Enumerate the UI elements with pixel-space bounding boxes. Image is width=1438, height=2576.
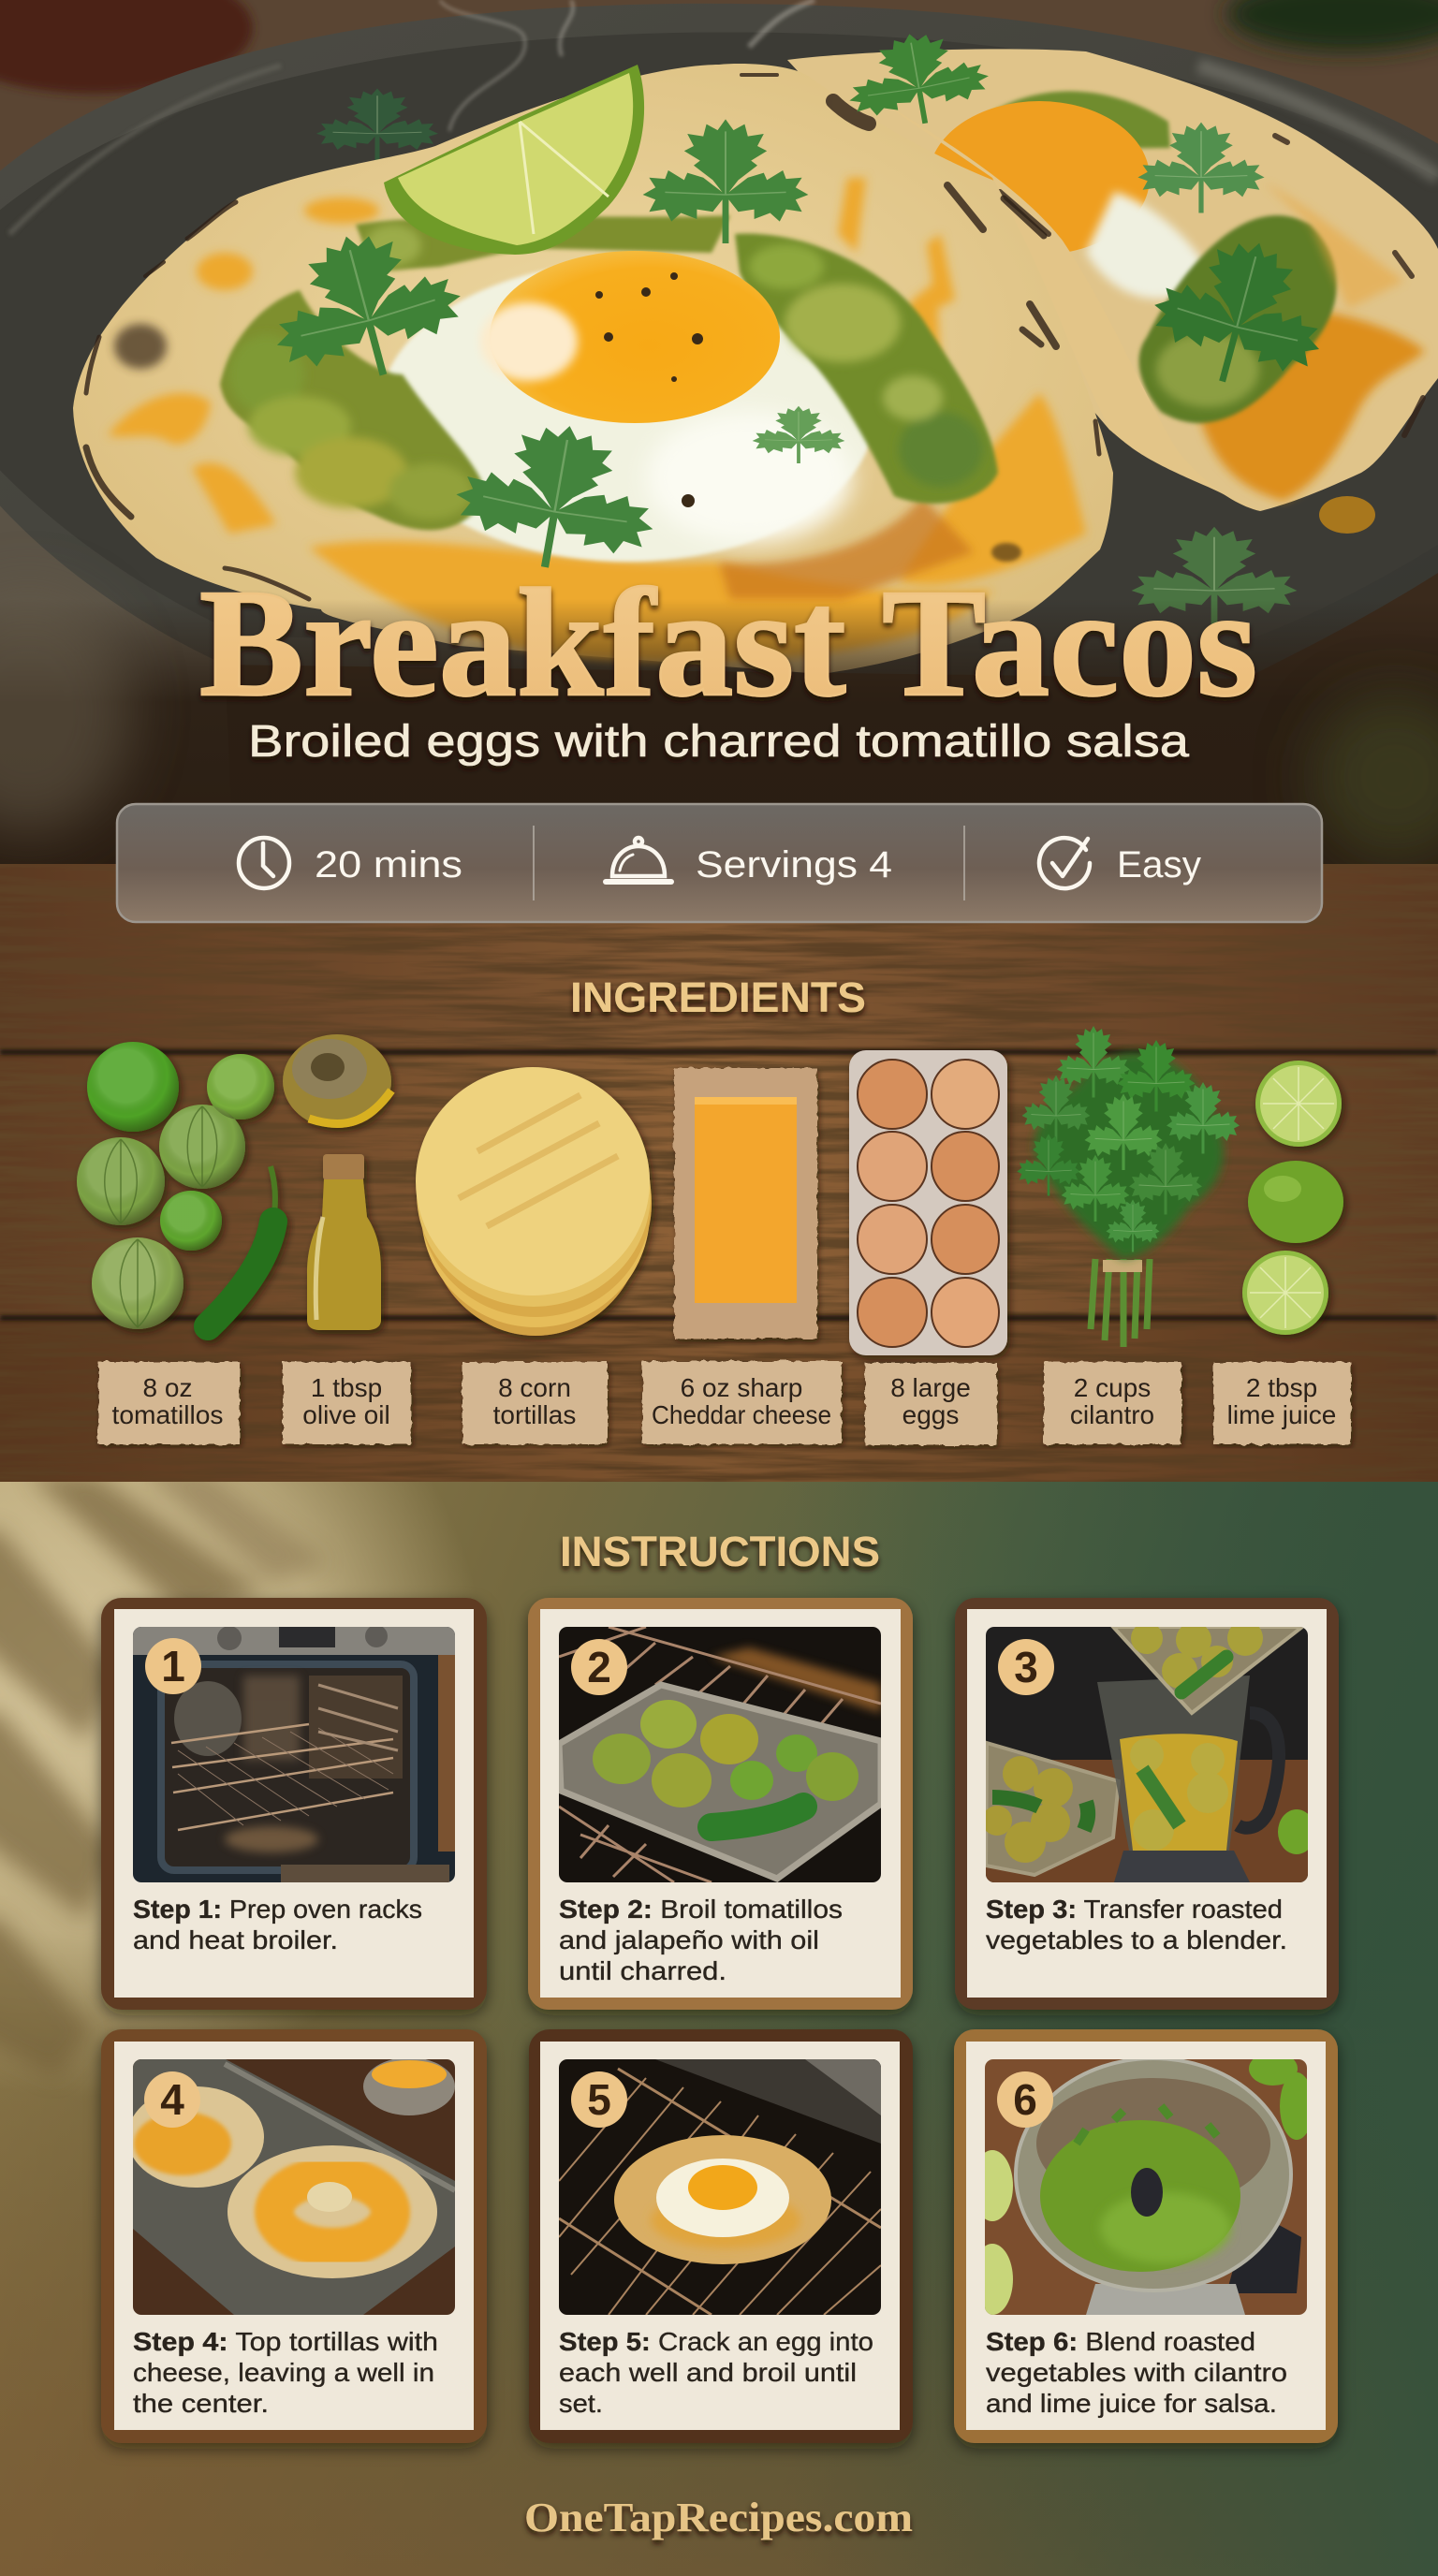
dark fade overlay — [0, 599, 1438, 871]
step card 6 — [954, 2029, 1338, 2443]
step card 2 — [528, 1598, 913, 2010]
label: olive oil — [283, 1362, 411, 1444]
servings: Servings 4 — [696, 844, 892, 886]
title: Breakfast Tacos — [199, 557, 1257, 728]
step card 5 — [529, 2029, 913, 2443]
label: lime juice: 2 tbsp — [1246, 1373, 1317, 1402]
panel: hero photo of tacos — [0, 0, 1438, 880]
step 4 text: Step 4: Top tortillas with — [133, 2327, 421, 2356]
label: cilantro: 2 cups — [1074, 1373, 1151, 1402]
illustration: tomatillos on tray — [559, 1627, 881, 1882]
label: cheddar: 6 oz sharp — [681, 1373, 802, 1402]
badge: 3: 3 — [1014, 1643, 1038, 1691]
label: cheddar: Cheddar cheese — [652, 1400, 831, 1429]
badge: 2 — [571, 1639, 627, 1695]
label: lime juice: lime juice — [1227, 1400, 1336, 1429]
panel: instructions background — [0, 1273, 1438, 2576]
label: tomatillos: tomatillos — [112, 1400, 223, 1429]
step 5 text: set. — [559, 2389, 603, 2418]
step card 4 — [101, 2029, 487, 2443]
linen cloth — [0, 505, 213, 689]
label: olive oil: olive oil — [302, 1400, 390, 1429]
step 2 text: and jalapeño with oil — [559, 1925, 819, 1954]
step card 3 — [955, 1598, 1339, 2010]
cilantro leaf on plate — [316, 88, 438, 163]
step 1 text: and heat broiler. — [133, 1925, 338, 1954]
label: tortillas — [462, 1362, 608, 1444]
ingredient: limes — [1242, 1061, 1343, 1335]
ingredient labels — [98, 1361, 1351, 1445]
badge: 1 — [145, 1638, 201, 1694]
badge: 6: 6 — [1013, 2075, 1037, 2124]
steam — [440, 0, 814, 131]
step card 1 — [101, 1598, 487, 2010]
charred spots — [86, 75, 1099, 599]
step 3 text: vegetables to a blender. — [986, 1925, 1287, 1954]
melted cheese — [108, 178, 1086, 663]
step 4 text: the center. — [133, 2389, 269, 2418]
label: cilantro: cilantro — [1070, 1400, 1154, 1429]
label: tortillas: 8 corn — [498, 1373, 571, 1402]
step 3 text: Step 3: Transfer roasted — [986, 1895, 1275, 1924]
label: tomatillos: 8 oz — [143, 1373, 192, 1402]
ingredient: cheddar — [674, 1068, 817, 1339]
info bar — [117, 804, 1322, 922]
label: tomatillos — [98, 1362, 240, 1444]
ingredient: tomatillos and jalapeno — [77, 1042, 275, 1329]
lime wedge — [384, 65, 644, 255]
step 4 text: cheese, leaving a well in — [133, 2358, 434, 2387]
step 6 text: and lime juice for salsa. — [986, 2389, 1277, 2418]
ingredient: eggs in carton — [849, 1050, 1007, 1355]
badge: 4 — [144, 2071, 200, 2128]
step 6 text: Step 6: Blend roasted — [986, 2327, 1247, 2356]
green salsa left — [220, 215, 730, 530]
panel: wood ingredients board — [0, 864, 1438, 1482]
right taco — [787, 49, 1438, 534]
step 5 text: Step 5: Crack an egg into — [559, 2327, 863, 2356]
label: eggs: eggs — [902, 1400, 959, 1429]
illustration: blender with vegetables — [982, 1620, 1315, 1882]
egg white — [379, 262, 875, 562]
green salsa right — [735, 234, 998, 504]
step 2 text: until charred. — [559, 1956, 726, 1985]
badge: 5 — [571, 2071, 627, 2128]
prep time: 20 mins — [315, 844, 462, 886]
ingredient: corn tortillas — [416, 1067, 652, 1336]
step 5 text: each well and broil until — [559, 2358, 857, 2387]
cilantro leaves — [255, 22, 1342, 632]
icon: serving cloche — [606, 838, 671, 882]
badge: 4: 4 — [160, 2075, 184, 2124]
label: eggs — [865, 1363, 997, 1445]
illustration: open oven — [133, 1625, 455, 1883]
heading: instructions: INSTRUCTIONS — [560, 1528, 880, 1575]
icon: check circle — [1039, 838, 1090, 888]
ingredient: cilantro bunch — [1017, 1026, 1240, 1347]
footer brand: OneTapRecipes.com — [524, 2495, 913, 2540]
ingredient: olive oil — [283, 1034, 391, 1330]
label: cheddar — [642, 1361, 842, 1444]
heading: ingredients: INGREDIENTS — [570, 973, 866, 1021]
difficulty: Easy — [1117, 844, 1201, 886]
step 1 text: Step 1: Prep oven racks — [133, 1895, 418, 1924]
plate — [0, 4, 1438, 679]
yolk — [490, 251, 780, 423]
label: lime juice — [1213, 1362, 1351, 1444]
step 6 text: vegetables with cilantro — [986, 2358, 1287, 2387]
icon: clock — [239, 838, 289, 888]
illustration: blending salsa — [972, 2052, 1313, 2315]
illustration: egg on tortilla under broiler — [559, 2059, 881, 2315]
subtitle: Broiled eggs with charred tomatillo salsa — [248, 717, 1189, 767]
main taco — [73, 22, 1342, 674]
label: cilantro — [1044, 1362, 1181, 1444]
badge: 5: 5 — [587, 2075, 611, 2124]
badge: 1: 1 — [161, 1642, 185, 1690]
label: olive oil: 1 tbsp — [311, 1373, 382, 1402]
label: tortillas: tortillas — [493, 1400, 576, 1429]
illustration: tortillas with cheese — [127, 2057, 455, 2315]
badge: 2: 2 — [587, 1643, 611, 1691]
badge: 3 — [998, 1639, 1054, 1695]
badge: 6 — [997, 2071, 1053, 2128]
label: eggs: 8 large — [890, 1373, 971, 1402]
step 2 text: Step 2: Broil tomatillos — [559, 1895, 830, 1924]
